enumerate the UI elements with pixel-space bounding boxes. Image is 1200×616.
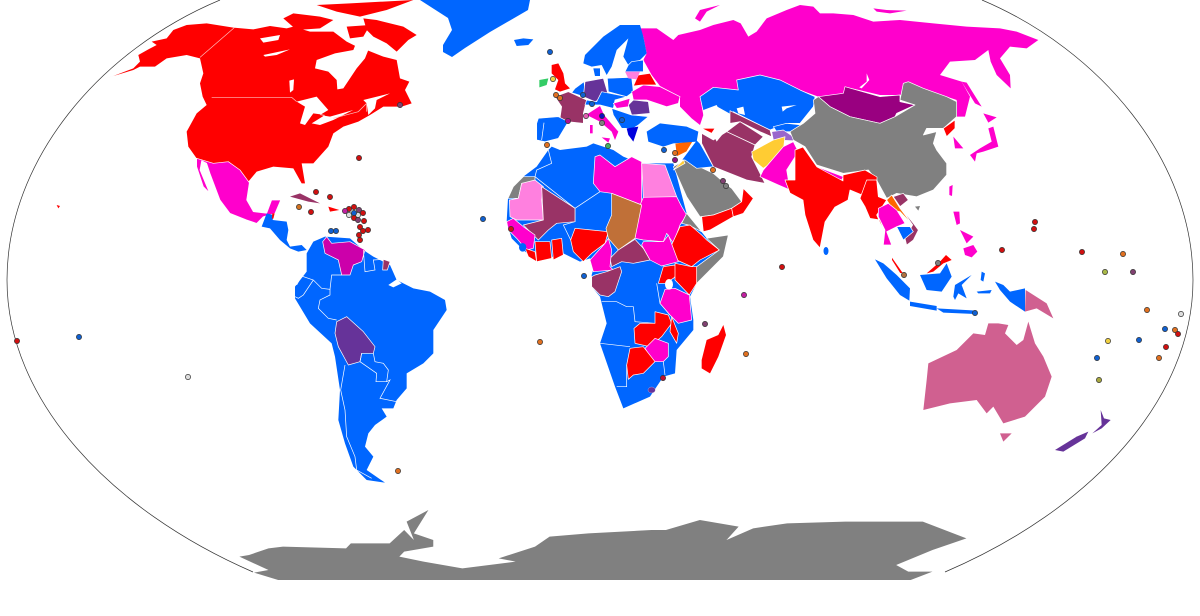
country: Liberia bbox=[525, 248, 537, 262]
island: Sardinia bbox=[590, 125, 593, 133]
country: Spain and Portugal bbox=[537, 117, 568, 142]
country: Sudan bbox=[635, 197, 687, 243]
country: Afghanistan bbox=[752, 137, 785, 168]
border: South Africa and Namibia bbox=[617, 365, 627, 387]
country: Greece bbox=[627, 127, 638, 142]
country: Botswana bbox=[627, 347, 655, 379]
sea: Caspian bbox=[703, 105, 723, 142]
island: Ellesmere bbox=[317, 0, 413, 17]
country: Uzbekistan bbox=[730, 111, 772, 137]
country: Cuba bbox=[290, 193, 320, 203]
island: Sulawesi bbox=[953, 275, 972, 300]
country: East Malaysia bbox=[927, 255, 952, 273]
continent: South America base bbox=[295, 237, 447, 483]
country: Kyrgyzstan bbox=[773, 123, 802, 132]
country: Azerbaijan bbox=[702, 128, 715, 133]
country: Turkey bbox=[647, 123, 698, 147]
region: South America bbox=[295, 237, 447, 483]
country: Western Sahara bbox=[508, 177, 535, 198]
lake: Hudson Bay bbox=[315, 42, 368, 89]
country: Jordan bbox=[673, 160, 685, 170]
gulf: St Lawrence bbox=[363, 93, 390, 115]
country: Zimbabwe bbox=[645, 338, 668, 362]
country: Malawi bbox=[670, 317, 678, 343]
island: Iceland bbox=[514, 38, 533, 46]
island: Novaya Zemlya bbox=[695, 5, 720, 22]
country: Myanmar bbox=[860, 180, 887, 237]
country: Kenya bbox=[675, 263, 697, 295]
country: Ivory Coast bbox=[535, 242, 552, 262]
island: Tasmania bbox=[1000, 433, 1012, 442]
country: Australia bbox=[923, 322, 1052, 423]
country: Japan bbox=[970, 127, 998, 162]
country: Madagascar bbox=[702, 325, 726, 373]
country: Papua New Guinea bbox=[1025, 290, 1053, 318]
border: Morocco and Algeria bbox=[535, 150, 552, 177]
country: Syria bbox=[675, 141, 693, 157]
country: South Sudan bbox=[642, 235, 678, 266]
border: Peru and Brazil bbox=[318, 289, 337, 320]
country: Poland bbox=[607, 77, 633, 97]
lake: Balkhash bbox=[782, 105, 797, 112]
island: Borneo bbox=[920, 263, 952, 292]
island: Severnaya Zemlya bbox=[873, 8, 907, 13]
country: Tajikistan bbox=[772, 130, 793, 141]
country: France bbox=[555, 92, 587, 123]
country: Iran bbox=[702, 132, 765, 183]
country: Saudi Arabia bbox=[673, 160, 742, 217]
border: Canada and Alaska bbox=[200, 28, 234, 57]
country: Zambia bbox=[634, 312, 672, 347]
country: New Zealand north bbox=[1092, 410, 1111, 433]
island: Victoria bbox=[283, 13, 333, 30]
border: Congo and Tanzania bbox=[657, 283, 670, 315]
country: India bbox=[785, 147, 877, 248]
country: North Korea bbox=[943, 120, 955, 137]
island: Lesser Sunda bbox=[937, 308, 977, 314]
border: Angola and DRC bbox=[602, 302, 655, 323]
country: Benelux bbox=[572, 82, 586, 97]
country: Kazakhstan bbox=[700, 75, 815, 130]
country: Venezuela bbox=[323, 237, 365, 275]
country: Cambodia bbox=[897, 227, 913, 240]
country: French Guiana bbox=[383, 259, 390, 270]
country: New Zealand south bbox=[1055, 432, 1088, 452]
country: Belize bbox=[272, 213, 275, 219]
island: Sicily bbox=[602, 137, 610, 143]
country: Pakistan bbox=[760, 142, 798, 190]
lake: Victoria bbox=[665, 279, 673, 290]
country: Taiwan bbox=[949, 185, 953, 196]
country: South Korea bbox=[953, 137, 963, 148]
island: Baffin bbox=[363, 18, 417, 52]
region: Africa bbox=[507, 143, 753, 408]
country: Bolivia bbox=[335, 317, 375, 365]
country: Malaysia peninsula bbox=[892, 257, 903, 273]
country: Sri Lanka bbox=[824, 247, 828, 255]
island: Hainan bbox=[915, 206, 920, 211]
border: Chile and Argentina bbox=[341, 365, 372, 478]
country: Laos bbox=[887, 195, 913, 225]
country: Gabon and Congo bbox=[592, 267, 622, 297]
border: Paraguay bbox=[360, 353, 388, 382]
country: Sierra Leone bbox=[519, 243, 526, 252]
country: Oman bbox=[732, 188, 753, 217]
island: Sumatra bbox=[875, 259, 910, 301]
region: Balkans bbox=[612, 108, 648, 128]
country: Lithuania bbox=[625, 72, 640, 79]
island: Java bbox=[910, 302, 937, 311]
country: Cameroon bbox=[590, 238, 613, 272]
country: Thailand bbox=[878, 203, 905, 245]
region: Central America bbox=[262, 213, 307, 252]
country: Egypt bbox=[642, 163, 677, 198]
border: Algeria and Niger bbox=[575, 192, 600, 208]
country: Philippines Mindanao bbox=[963, 245, 977, 257]
lake: Great Lakes bbox=[297, 97, 353, 125]
country: Canada and United States bbox=[97, 23, 412, 183]
country: Romania bbox=[628, 100, 650, 115]
country: Germany bbox=[583, 78, 608, 102]
country: Tanzania bbox=[660, 288, 692, 323]
country: United Kingdom bbox=[552, 63, 570, 92]
country: Libya bbox=[593, 155, 642, 205]
country: Belarus bbox=[633, 73, 657, 86]
country: Italy bbox=[586, 106, 618, 140]
country: Yemen bbox=[702, 208, 733, 232]
country: Nepal bbox=[817, 167, 843, 180]
country: Nigeria bbox=[571, 228, 608, 262]
lake: Great Bear bbox=[260, 35, 280, 43]
border: Colombia and Brazil bbox=[297, 275, 342, 289]
bay: Amazon mouth bbox=[388, 279, 402, 287]
country: Iraq bbox=[682, 140, 713, 168]
country: Ghana bbox=[552, 238, 563, 260]
region: Central Europe bbox=[585, 92, 627, 108]
country: Turkmenistan bbox=[727, 122, 763, 145]
continent: Africa base bbox=[507, 143, 728, 408]
country: Vietnam bbox=[893, 193, 918, 245]
island: West New Guinea bbox=[995, 282, 1025, 312]
country: Philippines Luzon bbox=[953, 212, 960, 225]
island: Greenland bbox=[420, 0, 530, 57]
lake: Winnipeg bbox=[289, 79, 294, 93]
region: Southeast Asia and Oceania bbox=[860, 180, 1111, 452]
country: Eritrea bbox=[682, 213, 702, 232]
island: Seram bbox=[977, 290, 992, 293]
region: East Asia bbox=[790, 82, 998, 198]
region: Scandinavia bbox=[583, 25, 647, 75]
country: Chad bbox=[606, 193, 642, 250]
country: Uganda bbox=[658, 265, 677, 283]
country: Ireland bbox=[539, 78, 548, 87]
country: Senegal and Guinea bbox=[507, 218, 535, 250]
border: Ecuador and Peru bbox=[295, 280, 313, 298]
lake: Great Slave bbox=[263, 49, 290, 57]
country: Ethiopia bbox=[670, 225, 719, 267]
island: Halmahera bbox=[981, 272, 985, 282]
island: Hokkaido bbox=[983, 113, 997, 123]
country: Mexico bbox=[197, 158, 281, 223]
border: West Africa bbox=[535, 177, 575, 240]
lake: Aral bbox=[737, 107, 745, 115]
lake: Baikal bbox=[859, 73, 869, 88]
country: Lesotho bbox=[648, 387, 655, 393]
region: North America bbox=[57, 0, 417, 252]
country: Somalia bbox=[697, 235, 728, 283]
country: Hungary bbox=[613, 98, 630, 108]
country: Mauritania bbox=[509, 180, 543, 220]
markers: small island states bbox=[14, 49, 1184, 474]
island: Hawaii bbox=[57, 205, 60, 208]
border: Namibia and Angola bbox=[600, 343, 630, 347]
country: Denmark bbox=[593, 68, 600, 76]
country: Mongolia bbox=[818, 87, 915, 123]
country: Russia bbox=[640, 5, 1038, 125]
border: Guyana and Suriname bbox=[363, 250, 383, 272]
region: Europe and West Asia bbox=[514, 5, 1038, 190]
country: Mali bbox=[523, 187, 575, 240]
country: Baltics bbox=[625, 60, 643, 72]
border: Portugal bbox=[542, 123, 544, 140]
island: Sakhalin bbox=[962, 82, 982, 107]
country: Central African Republic bbox=[610, 239, 650, 267]
country: Philippines Visayas bbox=[960, 230, 973, 243]
border: 49th parallel bbox=[212, 97, 297, 102]
border: Mozambique and South Africa bbox=[663, 362, 665, 375]
continent: Antarctica bbox=[239, 510, 966, 580]
border: eastern US bbox=[333, 103, 367, 118]
country: China bbox=[790, 82, 957, 198]
country: Ukraine bbox=[632, 85, 680, 107]
island: Somerset bbox=[347, 25, 370, 38]
border: Uruguay bbox=[380, 380, 397, 402]
country: Dominican Republic bbox=[328, 207, 339, 212]
